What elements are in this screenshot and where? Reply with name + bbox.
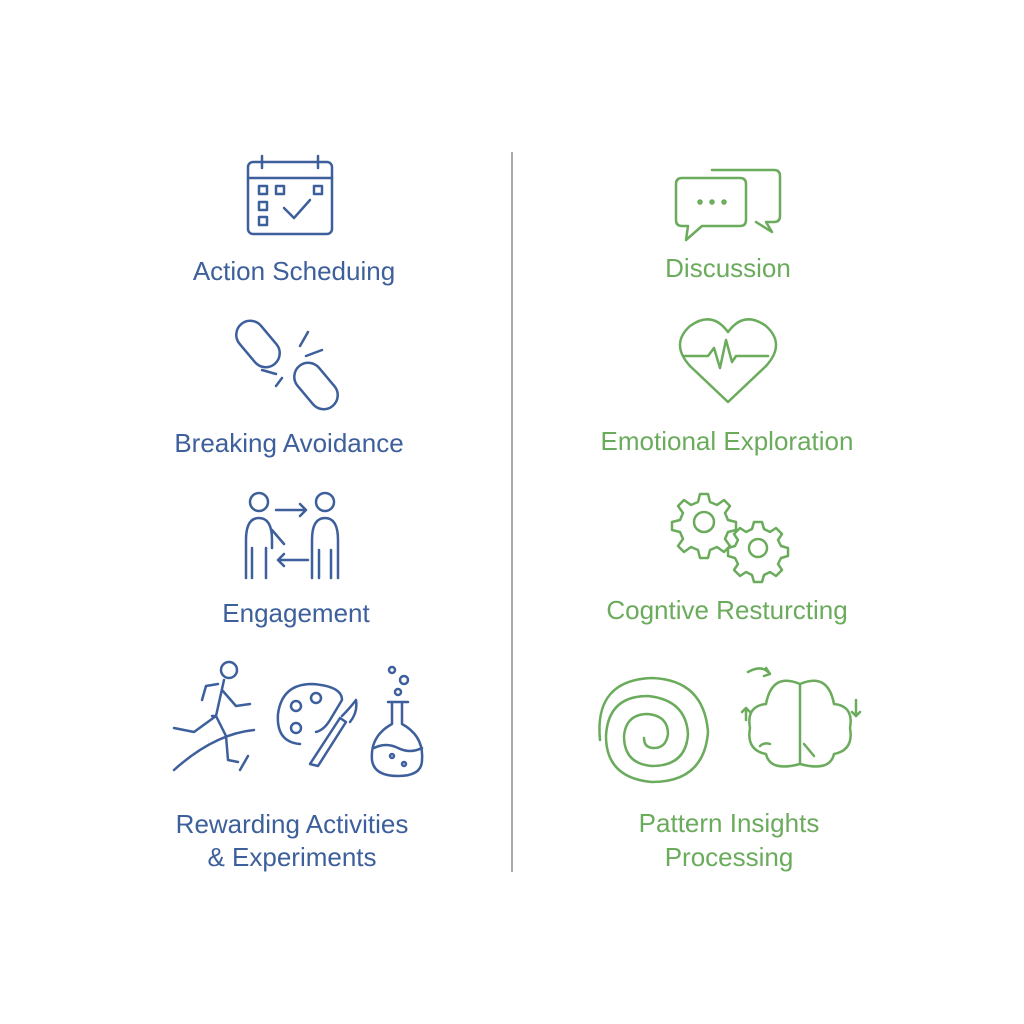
label: & Experiments: & Experiments [207, 842, 377, 872]
icon: gears [672, 494, 788, 582]
icon: broken chain [231, 315, 343, 415]
label: Rewarding Activities: Rewarding Activities [176, 809, 408, 839]
icon: speech bubbles [676, 170, 780, 240]
label: Breaking Avoidance: Breaking Avoidance [174, 428, 404, 458]
icon: spiral and brain [599, 668, 860, 782]
label: Discussion: Discussion [665, 253, 791, 283]
icon: two people exchange [246, 493, 338, 578]
label: Engagement: Engagement [222, 598, 370, 628]
icons: running, palette, flask [174, 662, 422, 776]
label: Processing: Processing [665, 842, 793, 872]
divider [511, 152, 513, 872]
label: Cognitive Restructuring: Cogntive Resturcting [606, 595, 848, 625]
icon: calendar [248, 156, 332, 234]
icon: heart [680, 319, 776, 402]
label: Emotional Exploration: Emotional Exploration [601, 426, 853, 456]
label: Pattern Insights: Pattern Insights [639, 808, 819, 838]
label: Action Scheduling: Action Scheduing [193, 256, 395, 286]
